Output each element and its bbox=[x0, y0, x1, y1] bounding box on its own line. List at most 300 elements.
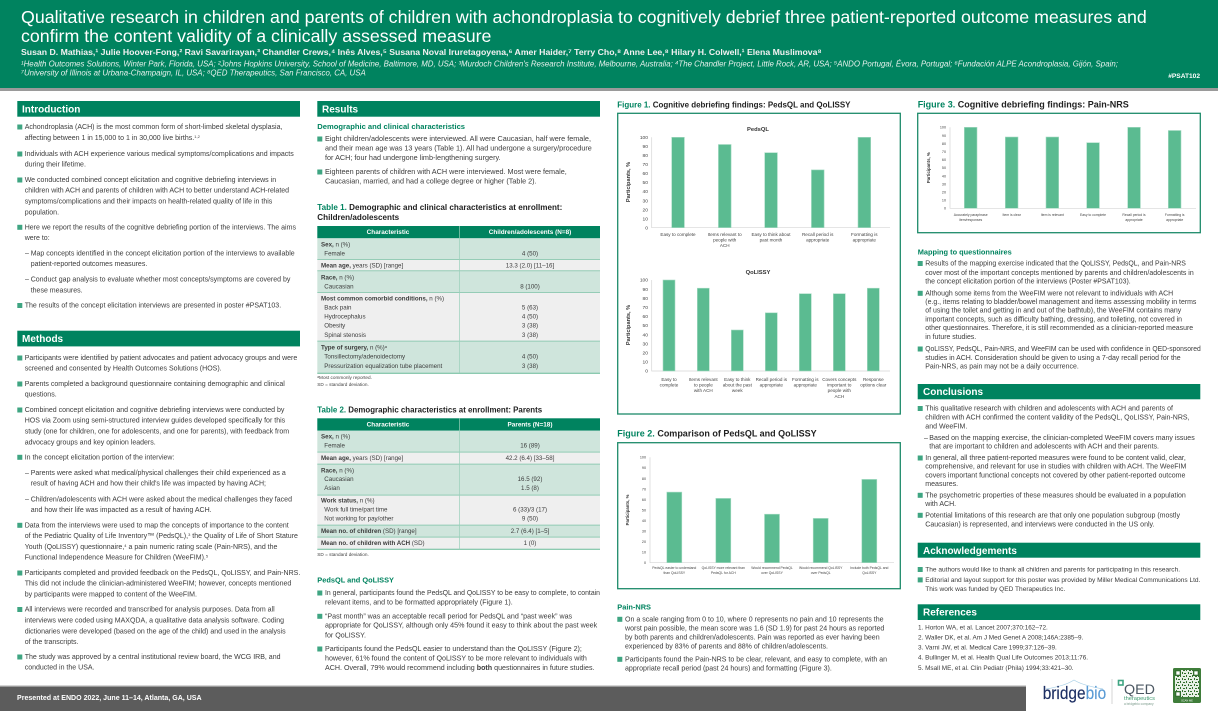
bullet: limitations: Caucasian) is represented, and interviews were conducted in the US only. bbox=[925, 521, 1155, 528]
figure 2 caption: Figure 2. Comparison of PedsQL and QoLISSY bbox=[617, 429, 817, 439]
table 1: Characteristic bbox=[367, 229, 410, 236]
chart: QoLISSY: Easy to bbox=[661, 377, 677, 382]
affiliations: ¹Health Outcomes Solutions, Winter Park, Florida, USA; ²Johns Hopkins University, School of Medicine, Baltimore, MD, USA; ³Murdoch Children's Research Institute, Melbourne, Australia; ⁴The Chandler Project, Little Rock, AR, USA; ⁵ANDO Portugal, Évora, Portugal; ⁶Fundación ALPE Acondroplasia, Gijón, Spain; bbox=[21, 60, 1118, 68]
sub-bullet: parents: result of having ACH and how their child's life was impacted by having ACH; bbox=[31, 481, 266, 488]
table 1: 5 (63) bbox=[522, 305, 538, 312]
reference list: 3. Varni JW, et al. Medical Care 1999;37:126–39. bbox=[918, 645, 1057, 652]
figure 3: 0 bbox=[944, 207, 946, 211]
panel: results bbox=[317, 101, 600, 672]
chart: QoLISSY: 30 bbox=[643, 341, 648, 347]
table 1 footnote: SD = standard deviation. bbox=[317, 382, 369, 387]
bullet: comparison: Participants found the PedsQL easier to understand than the QoLISSY (Figure 2); bbox=[325, 645, 582, 653]
bullet: impacts: Individuals with ACH experience various medical symptoms/complications and impacts bbox=[25, 151, 294, 158]
bullet: participants: screened and consented by Health Outcomes Solutions (HOS). bbox=[25, 366, 222, 373]
chart: PedsQL: 40 bbox=[643, 189, 648, 195]
table 2: Asian bbox=[324, 485, 340, 492]
bullet: confidence: QoLISSY, PedsQL, Pain-NRS, and WeeFIM can be used with confidence in QED-sponsored bbox=[925, 346, 1201, 353]
sub-bullet: mapping exercise: that are important to children and adolescents with ACH and their parents. bbox=[929, 444, 1159, 451]
divider between logos bbox=[1112, 679, 1113, 704]
figure 2: 70 bbox=[642, 487, 646, 491]
figure 2: 100 bbox=[640, 456, 646, 460]
chart: QoLISSY: important to bbox=[827, 383, 852, 388]
bullet: recording: dictionaries were developed (based on the age of the child) and used in the analysis bbox=[25, 628, 286, 635]
bullet: WeeFIM: (e.g., items relating to bladder/bowel management and items assessing mobility in terms bbox=[925, 299, 1197, 306]
chart: QoLISSY: appropriate bbox=[794, 383, 817, 388]
figure 3: Accurately paraphrase bbox=[954, 213, 988, 217]
figure 2: Participants, % bbox=[625, 494, 630, 525]
reference list: 5. Msall ME, et al. Clin Pediatr (Phila) 1994;33:421–30. bbox=[918, 665, 1074, 672]
QR code bbox=[1173, 668, 1201, 703]
bullet: content validity: and WeeFIM. bbox=[925, 424, 967, 431]
chart: QoLISSY: complete bbox=[660, 383, 679, 388]
heading: acknowledgements: Acknowledgements bbox=[923, 546, 1017, 557]
chart: QoLISSY: Covers concepts bbox=[822, 377, 857, 382]
chart: QoLISSY: Participants, % bbox=[626, 305, 632, 345]
table 2: 16 (89) bbox=[520, 443, 540, 450]
chart: QoLISSY: 10 bbox=[643, 360, 648, 366]
chart: QoLISSY: with ACH bbox=[694, 388, 713, 393]
table 2: 16.5 (92) bbox=[518, 476, 542, 483]
figure 3: 20 bbox=[942, 190, 946, 194]
chart: QoLISSY: options clear bbox=[860, 383, 887, 388]
bullet: general findings: In general, participants found the PedsQL and QoLISSY to be easy to complete, to contain bbox=[325, 589, 600, 597]
figure 2: PedsQL easier to understand bbox=[652, 566, 696, 570]
bullet: zoom interviews: advocacy groups and key opinion leaders. bbox=[25, 439, 156, 446]
table 2: years (SD) [range] bbox=[351, 455, 403, 462]
bullet: confidence bbox=[918, 346, 1201, 371]
subheading: PedsQL and QoLISSY: PedsQL and QoLISSY bbox=[317, 575, 394, 584]
table 1: Type of surgery, bbox=[321, 345, 368, 352]
sub-bullet: children: – bbox=[25, 496, 29, 503]
figure 2: QoLISSY more relevant than bbox=[702, 566, 745, 570]
figure 3: 70 bbox=[942, 150, 946, 154]
chart: PedsQL: 10 bbox=[643, 216, 648, 222]
bullet: interviews bbox=[17, 177, 289, 216]
table 2: 9 (50) bbox=[522, 516, 538, 523]
chart: QoLISSY: Formatting is bbox=[792, 377, 819, 382]
figure 3: 50 bbox=[942, 166, 946, 170]
figure 3: 90 bbox=[942, 134, 946, 138]
table 2: Mean no. of children with ACH bbox=[321, 540, 411, 547]
table 2: n (%) bbox=[334, 434, 350, 441]
chart: PedsQL: 80 bbox=[643, 153, 648, 159]
table 2: 1 (0) bbox=[524, 540, 536, 547]
table 1: Hydrocephalus bbox=[324, 314, 366, 321]
table 2: Parents (N=18) bbox=[508, 421, 552, 428]
heading: results: Results bbox=[322, 104, 359, 115]
bullet: data mapping bbox=[17, 522, 298, 562]
bullet: general findings: relevant items, and to be formatted appropriately (Figure 1). bbox=[325, 599, 513, 607]
poster number: #PSAT102 bbox=[1168, 73, 1200, 80]
bullet: participants: Participants were identified by patient advocates and patient advocacy groups and were bbox=[25, 355, 297, 362]
figure 2: Include both PedsQL and bbox=[850, 566, 888, 570]
chart: QoLISSY: week bbox=[732, 388, 743, 393]
bullet: data mapping: 5 bbox=[206, 554, 209, 559]
bullet: mapping results bbox=[918, 261, 1194, 286]
chart: QoLISSY: people with bbox=[828, 388, 851, 393]
bullet: recall period: for QoLISSY. bbox=[325, 631, 366, 639]
table 2: Caucasian bbox=[324, 476, 354, 483]
bullet: recall period: appropriate for QoLISSY, although only 45% found it easy to think about the past week bbox=[325, 622, 598, 630]
figure 3: 10 bbox=[942, 199, 946, 203]
table 2 bbox=[317, 418, 600, 550]
bullet: pain score: by both parents and children/adolescents. Pain was reported as ever having been bbox=[625, 634, 880, 641]
sub-bullet: map concepts: Map concepts identified in the concept elicitation portion of the interviews to available bbox=[31, 250, 295, 257]
panel: conclusions bbox=[918, 384, 1200, 528]
table 1: Sex, bbox=[321, 241, 334, 248]
table 2: n (%) bbox=[358, 498, 375, 505]
chart: PedsQL: Easy to think about bbox=[751, 232, 791, 237]
table 1: 3 (38) bbox=[522, 323, 538, 330]
bullet: content validity: This qualitative research with children and adolescents with ACH and parents of bbox=[925, 406, 1173, 413]
bullet: content valid: covers important functional concepts not covered by other patient-reported outcome bbox=[925, 472, 1186, 479]
table 1: Pressurization equalization tube placement bbox=[324, 363, 443, 370]
bullet: recording: interviews were coded using MAXQDA, a qualitative data analysis software. Coding bbox=[25, 617, 284, 624]
chart: PedsQL: 20 bbox=[643, 207, 648, 213]
bullet: recording bbox=[17, 607, 286, 646]
table 1: Caucasian bbox=[324, 283, 354, 290]
figure 3: Recall period is bbox=[1122, 213, 1146, 217]
chart: PedsQL: Recall period is bbox=[802, 232, 834, 237]
chart: QoLISSY: 20 bbox=[643, 350, 648, 356]
bullet: participants bbox=[17, 355, 297, 373]
bullet: pain score bbox=[617, 616, 884, 651]
figure 3: Item is clear bbox=[1003, 213, 1022, 217]
chart: PedsQL: appropriate bbox=[853, 238, 876, 243]
table 2: 6 (33)/3 (17) bbox=[513, 507, 547, 514]
bullet: data mapping: Youth (QoLISSY) questionnaire, bbox=[25, 544, 124, 551]
table 2: Race, bbox=[321, 467, 338, 474]
chart: QoLISSY: 50 bbox=[643, 323, 648, 329]
sub-bullet: children: Children/adolescents with ACH were asked about the medical challenges they faced bbox=[31, 496, 292, 503]
figure 2: 60 bbox=[642, 498, 646, 502]
bullet: children interviewed: for ACH; four had undergone limb-lengthening surgery. bbox=[325, 153, 501, 162]
bullet: pain score: experienced by 83% of parents and 88% of children/adolescents. bbox=[625, 644, 828, 651]
heading: results bbox=[317, 101, 600, 117]
bullet: WeeFIM: other questionnaires. Therefore, it is still recommended as a clinician-reported measure bbox=[925, 325, 1193, 332]
chart: QoLISSY: QoLISSY bbox=[746, 270, 771, 276]
chart: QoLISSY: 70 bbox=[643, 305, 648, 311]
bullet: approval: The study was approved by a central institutional review board, the WCG IRB, and bbox=[25, 654, 281, 661]
bullet: interviews: children with ACH and parents of children with ACH to better understand ACH-related bbox=[25, 188, 289, 195]
table 1: Children/adolescents (N=8) bbox=[489, 229, 571, 236]
bullet: comparison: ACH. Overall, 79% would recommend including bbox=[325, 664, 477, 672]
figure 3 bbox=[918, 113, 1200, 233]
bullet: content valid: In general, all three patient-reported measures were found to be content valid, clear, bbox=[925, 455, 1186, 462]
sub-bullet: gap analysis: – bbox=[25, 277, 29, 284]
table 1: a bbox=[385, 344, 388, 349]
bullet: concept elicitation: In the concept elicitation portion of the interview: bbox=[25, 454, 175, 461]
bullet: psychometric: The psychometric properties of these measures should be evaluated in a population bbox=[925, 492, 1186, 499]
bullet: psychometric: with ACH. bbox=[924, 501, 956, 508]
heading: references bbox=[918, 604, 1200, 620]
bullet: zoom interviews: Combined concept elicitation and cognitive debriefing interviews were conducted by bbox=[25, 407, 285, 414]
logo: QED Therapeutics: QED bbox=[1124, 681, 1155, 697]
bullet: approval bbox=[17, 654, 281, 672]
figure 3: 80 bbox=[942, 142, 946, 146]
table 1 caption: Children/adolescents bbox=[317, 213, 400, 222]
bullet: parents interviewed: Caucasian, married, and had a college degree or higher (Table 2). bbox=[325, 176, 537, 185]
table 2: Sex, bbox=[321, 434, 334, 441]
title: confirm the content validity of a clinically assessed measure bbox=[21, 26, 492, 46]
table 2: Characteristic bbox=[367, 421, 410, 428]
bullet: content validity: children with ACH confirmed the content validity of the PedsQL, QoLISSY, Pain-NRS, bbox=[925, 415, 1190, 422]
table 2: Work status, bbox=[321, 498, 358, 505]
bullet: data mapping: 3 bbox=[188, 532, 191, 537]
table 2 caption: Table 2. bbox=[317, 405, 346, 414]
heading: introduction: Introduction bbox=[22, 104, 80, 115]
chart: QoLISSY: appropriate bbox=[760, 383, 783, 388]
bullet: data mapping: Functional Independence Measure for Children (WeeFIM). bbox=[25, 555, 206, 562]
title: Qualitative research in children and parents of children with achondroplasia to cognitively debrief three patient-reported outcome measures and bbox=[21, 7, 1147, 27]
chart: PedsQL: Items relevant to bbox=[708, 232, 742, 237]
bullet: psychometric bbox=[918, 492, 1186, 508]
reference list: 1. Horton WA, et al. Lancet 2007;370:162–72. bbox=[918, 625, 1048, 632]
figure 2: Would recommend PedsQL bbox=[751, 566, 793, 570]
table 1: n (%) bbox=[428, 296, 444, 303]
figure 3: 100 bbox=[940, 126, 946, 130]
chart: QoLISSY: Items relevant bbox=[689, 377, 718, 382]
table 1: Obesity bbox=[324, 323, 346, 330]
bullet: general findings bbox=[317, 589, 600, 607]
bullet: children interviewed: and their mean age was 13 years (Table 1). All had undergone a surgery/procedure bbox=[325, 144, 592, 153]
bullet: aims: Here we report the results of the cognitive debriefing portion of the interviews. The aims bbox=[25, 224, 296, 231]
figure 2: 40 bbox=[642, 519, 646, 523]
chart: QoLISSY: 60 bbox=[643, 314, 648, 320]
sub-bullet: map concepts bbox=[25, 250, 295, 268]
figure 3: Easy to complete bbox=[1080, 213, 1106, 217]
bullet: recall period bbox=[317, 612, 598, 639]
figure 2: 50 bbox=[642, 508, 646, 512]
heading: acknowledgements bbox=[918, 543, 1200, 558]
table 1: Spinal stenosis bbox=[324, 332, 366, 339]
footer bar bbox=[0, 686, 1026, 711]
figure 2: QoLISSY bbox=[862, 571, 877, 575]
chart: PedsQL: 50 bbox=[643, 180, 648, 186]
bullet: interviews: symptoms/complications and their impacts on health-related quality of life in this bbox=[25, 198, 273, 205]
table 2: Work full time/part time bbox=[324, 507, 388, 514]
bullet: Pain-NRS feedback bbox=[617, 656, 887, 673]
heading: conclusions bbox=[918, 384, 1200, 399]
bullet: editorial support: Editorial and layout support for this poster was provided by Miller Medical Communications Ltd. bbox=[925, 577, 1201, 584]
bullet: questionnaire: Parents completed a background questionnaire containing demographic and clinical bbox=[25, 381, 285, 388]
table 1: 3 (38) bbox=[522, 363, 538, 370]
sub-bullet: gap analysis bbox=[25, 277, 291, 294]
bullet: pain score: On a scale ranging from 0 to 10, where 0 represents no pain and 10 represents the bbox=[625, 616, 884, 623]
authors: Susan D. Mathias,¹ Julie Hoover-Fong,² Ravi Savarirayan,³ Chandler Crews,⁴ Inês Alves,⁵ Susana Noval Iruretagoyena,⁶ Amer Haider,⁷ Terry Cho,⁸ Anne Lee,⁸ Hilary H. Colwell,¹ Elena Muslimova⁸ bbox=[21, 47, 822, 57]
panel: methods bbox=[17, 331, 300, 672]
chart: QoLISSY: 40 bbox=[643, 332, 648, 338]
bullet: mapping results: the concept elicitation portion of the interviews (Poster #PSAT103). bbox=[925, 279, 1131, 286]
sub-bullet: children bbox=[25, 496, 292, 514]
figure 3: Formatting is bbox=[1165, 213, 1185, 217]
bullet: recording: of the transcripts. bbox=[25, 639, 79, 646]
table 1 caption: Demographic and clinical characteristics at enrollment: bbox=[347, 203, 562, 212]
table 1: n (%) bbox=[338, 275, 354, 282]
bullet: editorial support bbox=[918, 577, 1201, 593]
heading: methods: Methods bbox=[22, 334, 64, 345]
bullet: thanks: The authors would like to thank all children and parents for participating in this research. bbox=[925, 567, 1180, 574]
chart: QoLISSY: 90 bbox=[643, 287, 648, 293]
figure 2: 0 bbox=[644, 561, 646, 565]
figure 3 caption: Figure 3. Cognitive debriefing findings: Pain-NRS bbox=[918, 100, 1129, 110]
bullet: feedback: This did not include the clinician-administered WeeFIM; however, concepts mentioned bbox=[25, 581, 291, 588]
table 2: (SD) bbox=[410, 540, 425, 547]
bullet: impacts bbox=[17, 151, 294, 169]
bullet: definition: Achondroplasia (ACH) is the most common form of short-limbed skeletal dysplasia, bbox=[25, 124, 282, 131]
chart: QoLISSY: Response bbox=[863, 377, 884, 382]
chart: PedsQL: people with bbox=[713, 238, 737, 243]
table 2: Female bbox=[324, 443, 345, 450]
bullet: content valid bbox=[918, 455, 1186, 488]
table 2 footnote: SD = standard deviation. bbox=[317, 552, 369, 557]
chart: QoLISSY: Recall period is bbox=[756, 377, 788, 382]
bullet: questionnaire bbox=[17, 381, 285, 399]
bullet: WeeFIM: in future studies. bbox=[925, 334, 976, 341]
chart: PedsQL: 0 bbox=[645, 225, 648, 231]
heading: introduction bbox=[17, 101, 300, 117]
table 2: Mean no. of children bbox=[321, 528, 381, 535]
bullet: data mapping: Data from the interviews were used to map the concepts of importance to the content bbox=[25, 522, 289, 529]
table 2: n (%) bbox=[338, 467, 354, 474]
chart: QoLISSY bbox=[626, 270, 890, 399]
bullet: mapping results: Results of the mapping exercise indicated that the QoLISSY, PedsQL, and Pain-NRS bbox=[925, 261, 1186, 268]
table 2: 2.7 (6.4) [1–5] bbox=[511, 528, 550, 535]
table 1 footnote: ᵃMost commonly reported. bbox=[317, 375, 372, 380]
table 1: n (%) bbox=[334, 241, 350, 248]
bullet: content validity bbox=[918, 406, 1190, 431]
affiliations: ⁷University of Illinois at Urbana-Champaign, IL, USA; ⁸QED Therapeutics, San Francisco, CA, USA bbox=[21, 68, 366, 78]
header banner bbox=[0, 0, 1218, 91]
bullet: parents interviewed: Eighteen parents of children with ACH were interviewed. Most were female, bbox=[325, 167, 567, 176]
figure 2 bbox=[618, 443, 900, 589]
figure 2: Would recommend QoLISSY bbox=[799, 566, 843, 570]
bullet: definition: 1,2 bbox=[194, 134, 201, 139]
bullet: interviews: population. bbox=[25, 209, 59, 216]
table 1: Back pain bbox=[324, 305, 352, 312]
bullet: WeeFIM bbox=[918, 290, 1197, 341]
chart: PedsQL: 30 bbox=[643, 198, 648, 204]
logo: QED Therapeutics: therapeutics bbox=[1124, 696, 1155, 702]
subheading: mapping: Mapping to questionnaires bbox=[918, 247, 1012, 256]
bullet: interviews: We conducted combined concept elicitation and cognitive debriefing interviews in bbox=[25, 177, 276, 184]
table 1 bbox=[317, 226, 600, 374]
bullet: confidence: Pain-NRS, as pain may not be a daily occurrence. bbox=[925, 364, 1079, 371]
bullet: comparison: both questionnaires in future studies. bbox=[477, 664, 594, 672]
bullet: data mapping: of the Pediatric Quality of Life Inventory™ (PedsQL), bbox=[25, 533, 188, 540]
bullet: comparison: however, 61% found the content of QoLISSY to be more relevant to individuals with bbox=[325, 655, 587, 663]
bullet: parents interviewed bbox=[317, 167, 567, 185]
bullet: feedback: Participants completed and provided feedback on the PedsQL, QoLISSY, and Pain-NRS. bbox=[25, 570, 300, 577]
figure 1 caption: Figure 1. Cognitive debriefing findings: PedsQL and QoLISSY bbox=[617, 100, 851, 109]
bullet: children interviewed bbox=[317, 134, 592, 162]
figure 2: 20 bbox=[642, 540, 646, 544]
bullet: editorial support: This work was funded by QED Therapeutics Inc. bbox=[925, 586, 1065, 593]
bullet: recall period: “Past month” was an acceptable recall period for PedsQL and “past week” was bbox=[325, 612, 573, 620]
logo: QED Therapeutics bbox=[1118, 680, 1155, 706]
figure 2: 90 bbox=[642, 466, 646, 470]
panel: acknowledgements bbox=[918, 543, 1201, 593]
bullet: content valid: comprehensive, and relevant for use in studies with children with ACH. The WeeFIM bbox=[925, 464, 1186, 471]
chart: PedsQL: PedsQL bbox=[747, 127, 769, 133]
bullet: comparison bbox=[317, 645, 595, 672]
bullet: zoom interviews: study (one for children, one for adolescents, and one for parents), with feedback from bbox=[25, 428, 289, 435]
chart: QoLISSY: to people bbox=[694, 383, 713, 388]
subheading: demographic: Demographic and clinical characteristics bbox=[317, 122, 465, 131]
sub-bullet: children: and how their life was impacted as a result of having ACH. bbox=[31, 507, 212, 514]
chart: PedsQL: ACH bbox=[720, 243, 730, 248]
figure 2: 10 bbox=[642, 551, 646, 555]
sub-bullet: parents: – bbox=[25, 470, 29, 477]
bullet: confidence: studies in ACH. Consideration should be given to using a 7-day recall period for the bbox=[925, 355, 1181, 362]
figure 3: 40 bbox=[942, 174, 946, 178]
heading: methods bbox=[17, 331, 300, 346]
table 2: Not working for pay/other bbox=[324, 516, 393, 523]
figure 2: over PedsQL bbox=[811, 571, 831, 575]
table 1: 4 (50) bbox=[522, 314, 538, 321]
figure 3: Item is relevant bbox=[1041, 213, 1064, 217]
figure 3: appropriate bbox=[1125, 218, 1143, 222]
bullet: definition: affecting between 1 in 15,000 to 1 in 30,000 live births. bbox=[25, 135, 194, 142]
chart: PedsQL: Formatting is bbox=[851, 232, 878, 237]
subheading: Pain-NRS: Pain-NRS bbox=[617, 602, 651, 611]
figure 3: item/responses bbox=[959, 218, 982, 222]
logo: bridgebio: bridgebio bbox=[1043, 683, 1106, 703]
chart: QoLISSY: ACH bbox=[834, 394, 844, 399]
sub-bullet: gap analysis: these measures. bbox=[31, 287, 83, 294]
table 1: 4 (50) bbox=[522, 251, 538, 258]
bullet: approval: conducted in the USA. bbox=[25, 665, 95, 672]
sub-bullet: mapping exercise: Based on the mapping exercise, the clinician-completed WeeFIM covers many issues bbox=[929, 435, 1195, 442]
bullet: data mapping: the Quality of Life of Short Stature bbox=[190, 533, 298, 540]
panel: introduction bbox=[17, 101, 300, 310]
QR code: SCAN ME bbox=[1181, 698, 1193, 702]
bullet: poster 103: The results of the concept elicitation interviews are presented in poster #PSAT103. bbox=[25, 303, 281, 310]
table 2: 42.2 (6.4) [33–58] bbox=[506, 455, 555, 462]
bullet: mapping results: cover most of the important concepts mentioned by parents and children/adolescents in bbox=[925, 270, 1194, 277]
chart: QoLISSY: about the past bbox=[723, 383, 753, 388]
panel: mapping to questionnaires bbox=[918, 247, 1201, 371]
table 2: Mean age, bbox=[321, 455, 351, 462]
bullet: limitations bbox=[918, 512, 1180, 528]
panel: Pain-NRS bbox=[617, 602, 887, 673]
chart: QoLISSY: 80 bbox=[643, 296, 648, 302]
table 1: years (SD) [range] bbox=[351, 263, 403, 270]
bullet: impacts: during their lifetime. bbox=[25, 162, 86, 169]
chart: PedsQL: 90 bbox=[643, 144, 648, 150]
table 1: 3 (38) bbox=[522, 332, 538, 339]
chart: PedsQL: 60 bbox=[643, 171, 648, 177]
table 2 caption: Demographic characteristics at enrollment: Parents bbox=[346, 405, 543, 414]
table 1: 4 (50) bbox=[522, 354, 538, 361]
bullet: zoom interviews: HOS via Zoom using semi-structured interview guides developed specifically for this bbox=[25, 418, 286, 425]
table 1 caption: Table 1. bbox=[317, 203, 347, 212]
sub-bullet: map concepts: – bbox=[25, 250, 29, 257]
chart: PedsQL: past month bbox=[760, 238, 783, 243]
sub-bullet: mapping exercise bbox=[924, 435, 1195, 451]
bullet: definition bbox=[17, 124, 282, 142]
table 1: n (%) bbox=[368, 345, 385, 352]
figure 2: over QoLISSY bbox=[761, 571, 784, 575]
reference list: 2. Waller DK, et al. Am J Med Genet A 2008;146A:2385–9. bbox=[918, 635, 1084, 642]
chart: QoLISSY: 0 bbox=[645, 369, 648, 375]
figure 3: 60 bbox=[942, 158, 946, 162]
bullet: pain score: worst pain possible, the mean score was 1.6 (SD 1.9) for past 24 hours as reported bbox=[624, 625, 884, 632]
bullet: Pain-NRS feedback: Participants found the Pain-NRS to be clear, relevant, and easy to complete, with an bbox=[625, 656, 887, 663]
bullet: WeeFIM: Although some items from the WeeFIM were not relevant to individuals with ACH bbox=[925, 290, 1173, 297]
bullet: data mapping: 4 bbox=[124, 543, 127, 548]
table 1: Most common comorbid conditions, bbox=[321, 296, 428, 303]
